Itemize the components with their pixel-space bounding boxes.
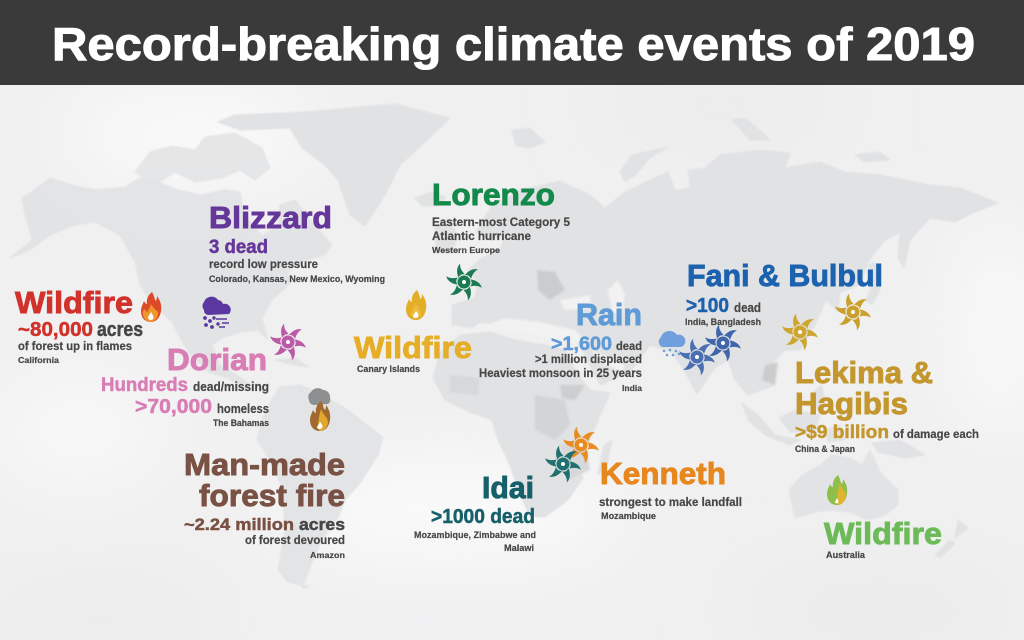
- icon: cyclone Bulbul: [705, 324, 741, 362]
- world map: [10, 104, 998, 588]
- event: Wildfire California: California: [18, 355, 59, 365]
- map: Arctic islands: [135, 133, 270, 185]
- title bar: [0, 0, 1024, 85]
- event: Dorian: dead/missing: [193, 380, 269, 394]
- icon: rain cloud: [659, 331, 685, 356]
- map: Novaya Zemlya: [620, 147, 668, 182]
- event: Rain: Rain: [576, 297, 642, 332]
- title: Record-breaking climate events of 2019: [52, 18, 975, 70]
- event: Kenneth: Kenneth: [600, 456, 726, 491]
- map: Japan: [866, 262, 880, 305]
- event: Wildfire Canary Islands: Canary Islands: [357, 364, 420, 374]
- icon: blizzard cloud: [202, 297, 231, 329]
- event: Kenneth: Mozambique: [601, 511, 656, 521]
- map: inland seas: [480, 280, 625, 372]
- event: Man-made forest fire: forest fire: [199, 478, 345, 513]
- event: Man-made forest fire: [184, 447, 345, 560]
- event: Lekima and Hagibis: China & Japan: [795, 444, 855, 454]
- map: South America: [257, 385, 383, 588]
- icon: yellow flame: [406, 290, 426, 320]
- event: Idai: Idai: [482, 470, 534, 505]
- map: Australia: [789, 450, 898, 520]
- event: Idai: Malawi: [504, 543, 534, 553]
- icon: cyclone Dorian: [270, 323, 306, 361]
- map: Greenland: [218, 104, 450, 226]
- event: Blizzard: record low pressure: [209, 257, 318, 271]
- event: Dorian: homeless: [217, 402, 269, 416]
- event: Blizzard: [209, 200, 385, 284]
- map: Africa: [433, 332, 610, 517]
- event: Fani and Bulbul: [685, 258, 883, 327]
- map: Arctic archipelago east: [732, 118, 890, 162]
- event: Lekima and Hagibis: [795, 355, 979, 454]
- event: Man-made forest fire: ~2.24 million: [184, 515, 294, 534]
- map: shaded countries: [450, 270, 778, 480]
- event: Fani and Bulbul: >100: [686, 295, 729, 317]
- event: Lorenzo: Western Europe: [432, 245, 500, 255]
- event: Dorian: The Bahamas: [213, 418, 269, 428]
- icon: cyclone Fani: [679, 338, 715, 376]
- event: Wildfire Australia: Australia: [826, 550, 866, 560]
- event: Blizzard: 3 dead: [209, 237, 268, 258]
- map: Madagascar: [598, 440, 612, 474]
- event: Rain: Heaviest monsoon in 25 years: [479, 366, 642, 380]
- event: Kenneth: strongest to make landfall: [599, 495, 742, 509]
- event: Lorenzo: Atlantic hurricane: [432, 229, 531, 243]
- event: Idai: [414, 470, 536, 553]
- map: Svalbard: [512, 128, 545, 148]
- event: Lorenzo: Lorenzo: [432, 177, 555, 212]
- event: Wildfire California: Wildfire: [15, 285, 133, 320]
- event: Idai: Mozambique, Zimbabwe and: [414, 530, 536, 540]
- map: North America: [10, 178, 332, 390]
- event: Blizzard: Blizzard: [209, 200, 332, 235]
- icon: red flame: [141, 292, 161, 322]
- icon: cyclone Kenneth: [563, 426, 599, 464]
- icon: smoke and Amazon flame: [308, 388, 330, 431]
- event: Idai: >1000 dead: [431, 506, 535, 528]
- event: Man-made forest fire: Amazon: [310, 550, 345, 560]
- event: Wildfire Australia: Wildfire: [824, 516, 942, 551]
- icon: cyclone Lorenzo: [446, 263, 482, 301]
- icon: cyclone Lekima: [782, 313, 818, 351]
- event: Fani and Bulbul: India, Bangladesh: [685, 317, 761, 327]
- event: Fani and Bulbul: Fani & Bulbul: [687, 258, 883, 293]
- event: Dorian: [101, 342, 269, 428]
- map: Iceland: [415, 192, 446, 206]
- event: Kenneth: [599, 456, 742, 521]
- event: Blizzard: Colorado, Kansas, New Mexico, Wyoming: [209, 274, 385, 284]
- event: Lekima and Hagibis: Hagibis: [795, 386, 908, 421]
- event: Wildfire California: ~80,000: [18, 319, 93, 341]
- event: Lorenzo: [432, 177, 570, 255]
- event: Lekima and Hagibis: of damage each: [893, 427, 979, 441]
- map: New Zealand: [935, 520, 968, 558]
- icon: cyclone Hagibis: [835, 293, 871, 331]
- map: Caribbean: [275, 358, 308, 367]
- event: Wildfire California: [15, 285, 143, 365]
- event: Dorian: Hundreds: [101, 375, 188, 396]
- event: Wildfire California: of forest up in flames: [18, 339, 132, 353]
- event: Lekima and Hagibis: >$9 billion: [795, 422, 889, 442]
- event: Man-made forest fire: Man-made: [184, 447, 345, 482]
- event: Dorian: >70,000: [135, 396, 212, 418]
- event: Wildfire Canary Islands: Wildfire: [354, 330, 472, 365]
- icon: green flame: [827, 475, 847, 505]
- event: Rain: >1 million displaced: [535, 352, 642, 366]
- event: Rain: India: [622, 383, 642, 393]
- event: Lekima and Hagibis: Lekima &: [795, 355, 933, 390]
- icon: cyclone Idai: [545, 445, 581, 483]
- event: Fani and Bulbul: dead: [734, 301, 761, 315]
- event: Lorenzo: Eastern-most Category 5: [432, 215, 570, 229]
- event: Man-made forest fire: acres: [299, 515, 345, 534]
- map: Eurasia: [452, 150, 998, 395]
- event: Man-made forest fire: of forest devoured: [245, 533, 345, 547]
- event: Rain: [479, 297, 642, 393]
- map: Britain: [435, 218, 458, 252]
- event: Dorian: Dorian: [167, 342, 267, 377]
- map: Southeast Asia islands: [742, 385, 925, 458]
- event: Rain: dead: [616, 339, 642, 353]
- event: Wildfire California: acres: [97, 319, 143, 341]
- event: Rain: >1,600: [551, 334, 612, 355]
